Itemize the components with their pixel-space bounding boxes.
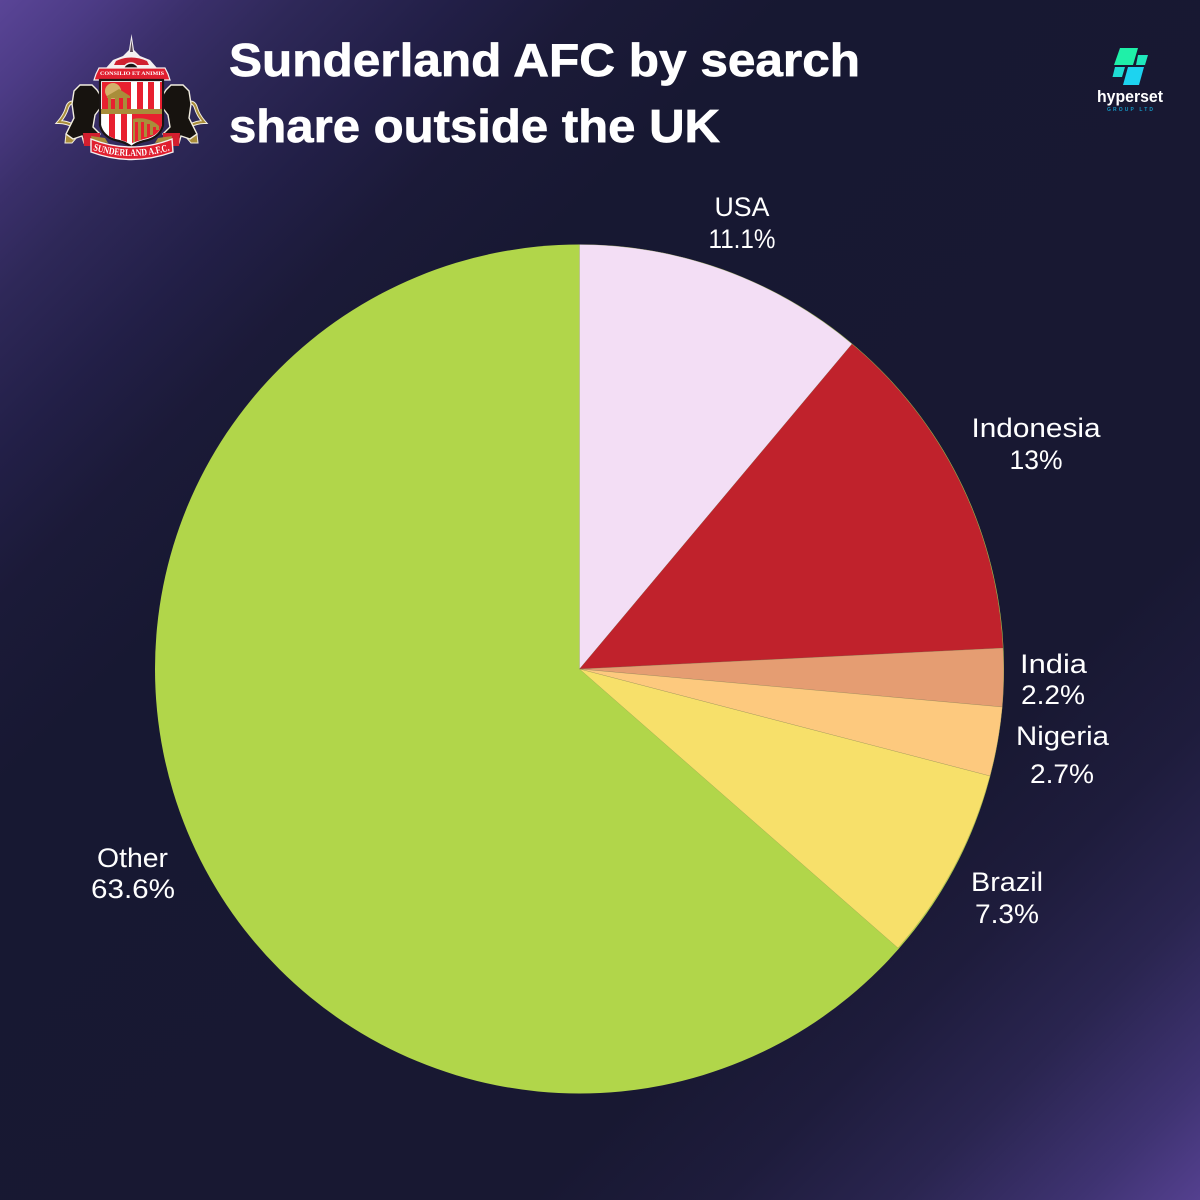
title: share outside the UK	[229, 100, 720, 152]
label: Nigeria: Nigeria	[1016, 721, 1110, 751]
shield stripes upper right	[137, 82, 162, 109]
crest ribbon	[91, 139, 173, 160]
label: Brazil: Brazil	[971, 867, 1043, 897]
label: USA: 11.1%	[708, 224, 776, 254]
ribbon gold ends	[91, 136, 172, 143]
viaduct	[133, 118, 159, 142]
lion left	[59, 85, 102, 143]
label: Other: Other	[97, 843, 168, 873]
crest ribbon text: SUNDERLAND A.F.C.	[94, 144, 170, 156]
slice: Other 63.6%	[155, 244, 1004, 1094]
label: Other: 63.6%	[91, 874, 175, 904]
label: Nigeria: 2.7%	[1030, 759, 1094, 789]
logo mark	[1112, 48, 1148, 85]
logo tagline: GROUP LTD	[1107, 107, 1153, 113]
slice: Indonesia 13%	[580, 344, 1003, 669]
icon: hyperset logo	[1097, 48, 1163, 113]
label: Indonesia: Indonesia	[972, 413, 1102, 443]
crest ribbon flags	[83, 133, 180, 146]
lion right	[161, 85, 204, 143]
shield	[100, 80, 163, 147]
gold band	[101, 109, 162, 114]
icon: Sunderland AFC crest	[54, 34, 208, 160]
label: USA: USA	[714, 192, 770, 222]
label: India: India	[1020, 649, 1088, 679]
shield stripes lower left	[109, 114, 127, 142]
slice: Nigeria 2.7%	[580, 669, 1002, 776]
label: Indonesia: 13%	[1010, 445, 1062, 475]
sun	[105, 83, 121, 99]
temple	[107, 89, 130, 109]
logo wordmark: hyperset	[1097, 87, 1163, 106]
crest banner text: CONSILIO ET ANIMIS	[100, 72, 164, 75]
shield lower right	[132, 114, 162, 143]
label: India: 2.2%	[1021, 680, 1085, 710]
shield red upper left	[102, 82, 131, 109]
crest spire	[106, 34, 157, 68]
label: Brazil: 7.3%	[975, 899, 1039, 929]
slice: Brazil 7.3%	[580, 669, 990, 948]
crest banner top	[94, 68, 170, 80]
pie chart	[155, 244, 1004, 1094]
title: Sunderland AFC by search	[229, 34, 860, 86]
slice: India 2.2%	[580, 648, 1004, 707]
slice: USA 11.1%	[580, 244, 852, 669]
